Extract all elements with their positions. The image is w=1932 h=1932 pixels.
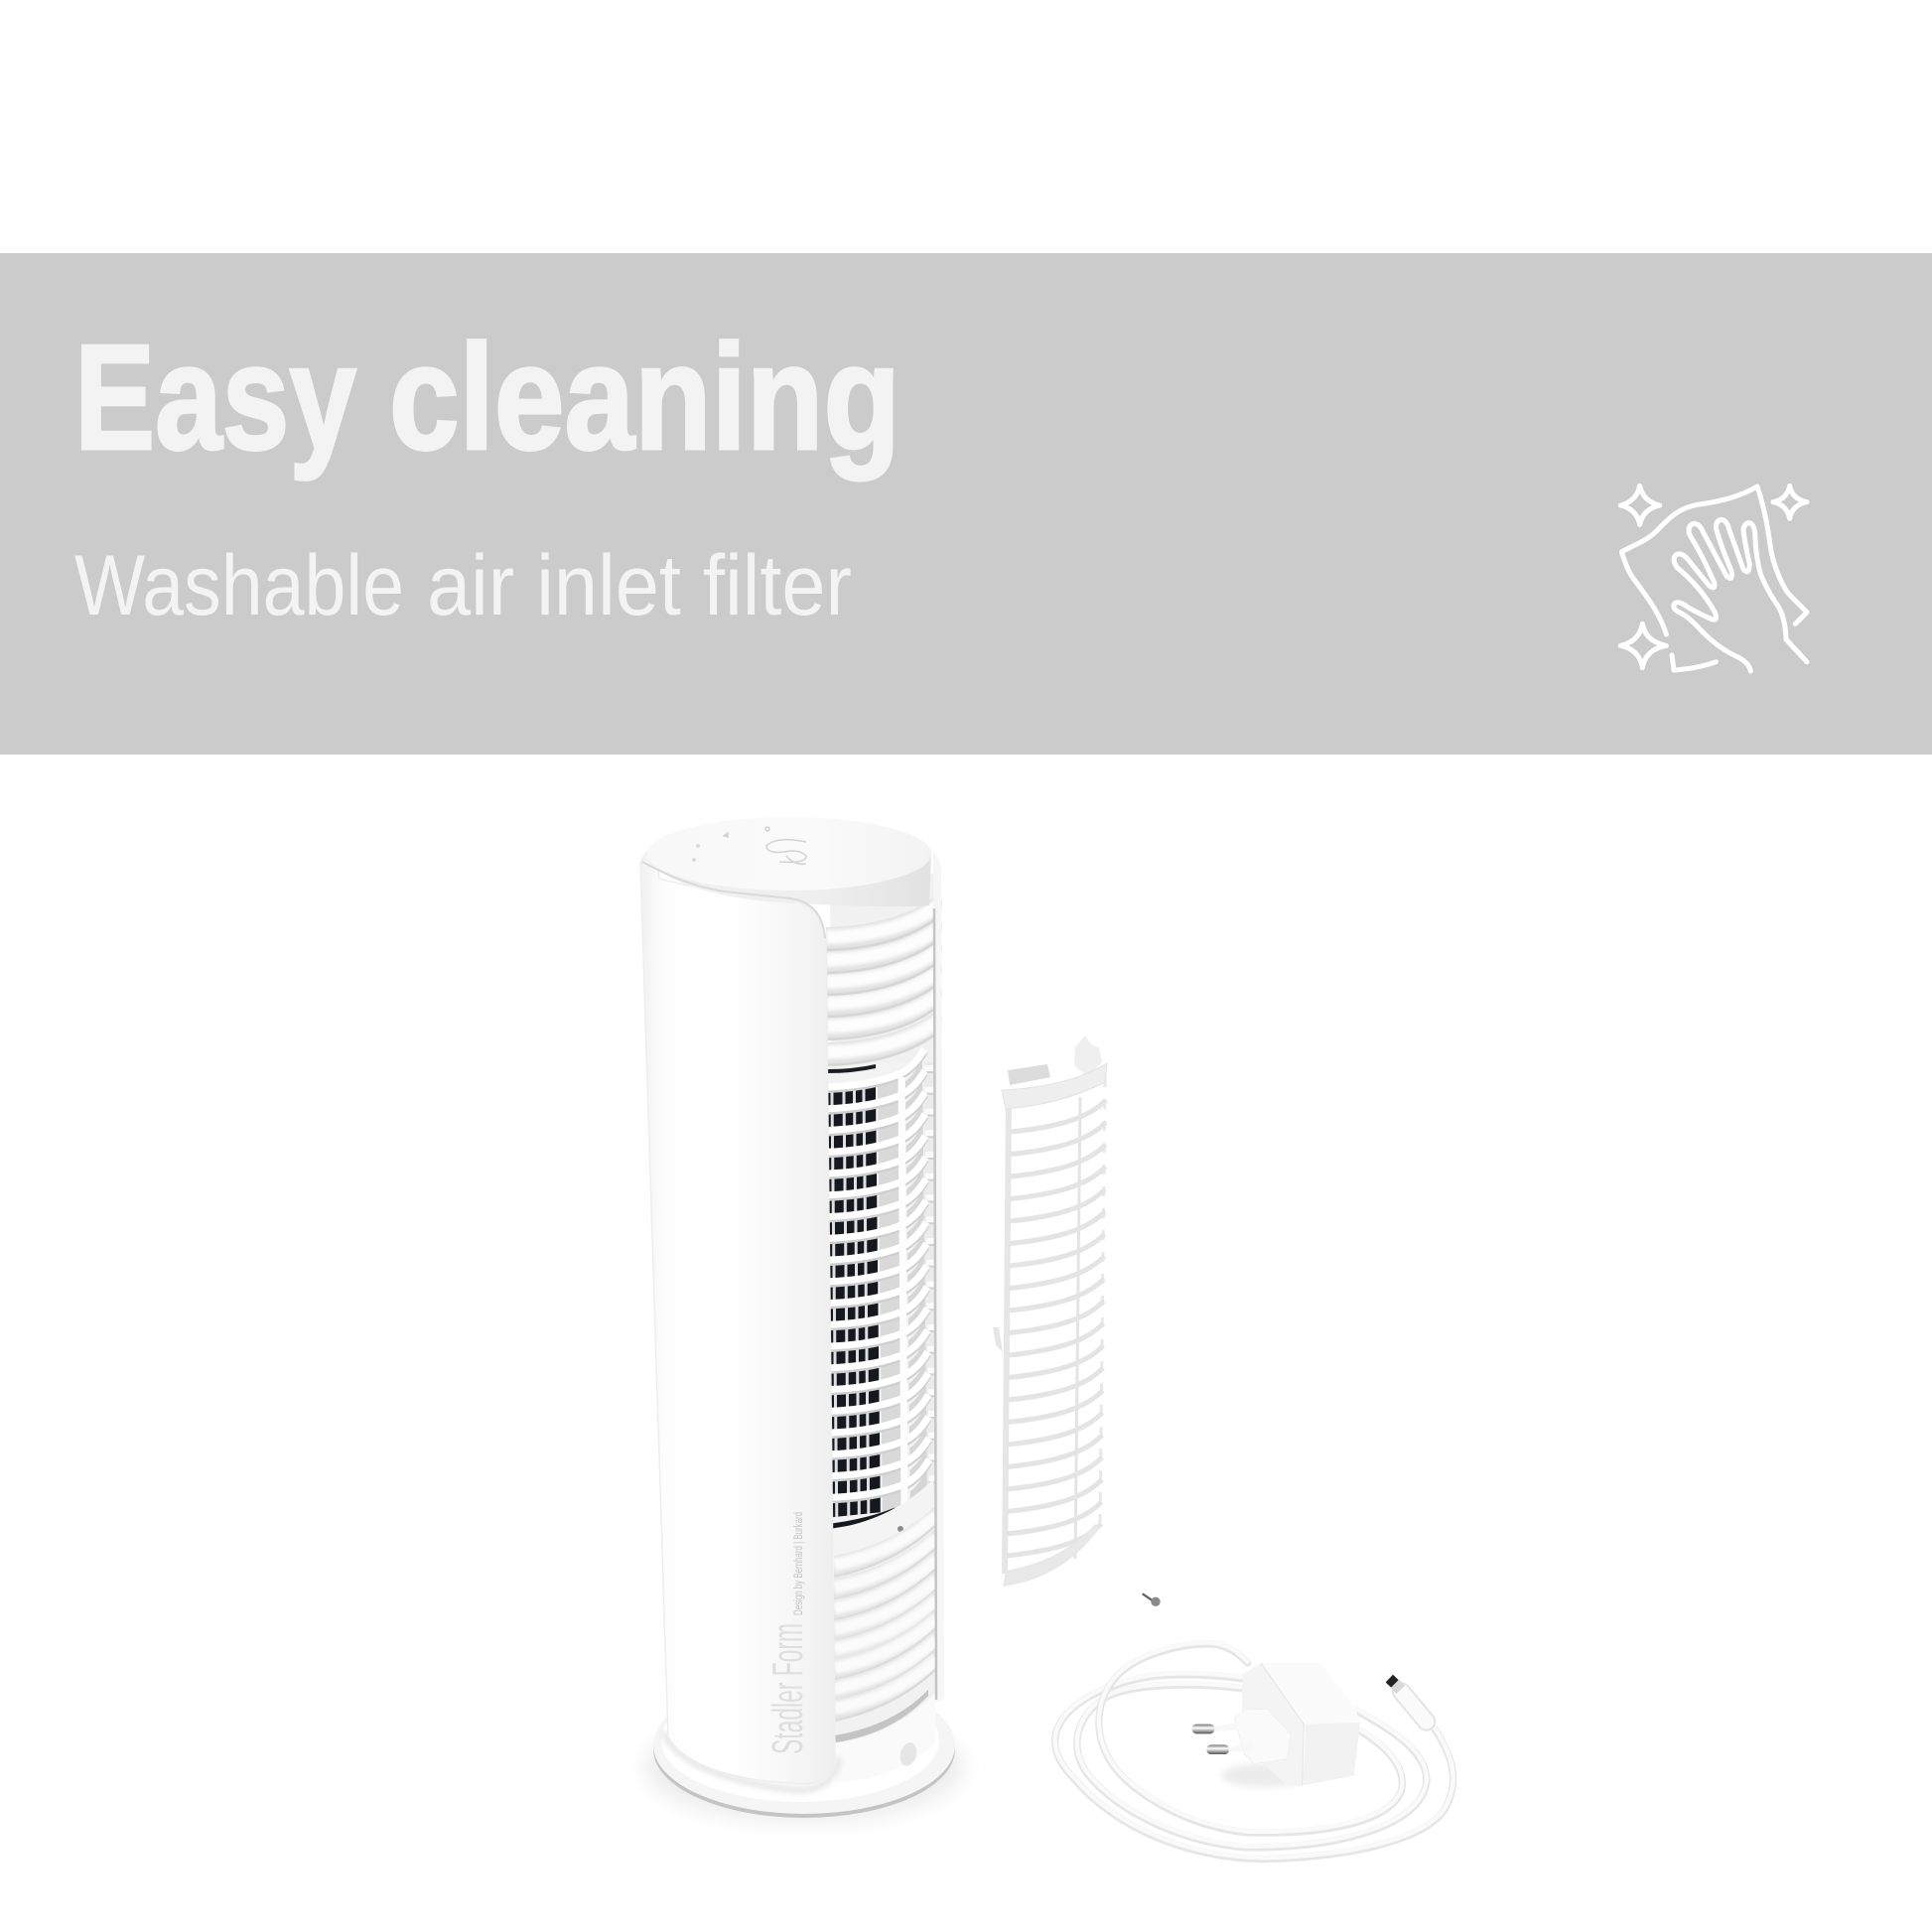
lower grille edge <box>832 1510 896 1526</box>
title: Easy <box>74 313 356 481</box>
outer shell <box>640 846 835 1784</box>
bottom band <box>1003 1524 1099 1587</box>
subtitle: Washable <box>74 538 404 633</box>
right rail <box>1100 1077 1105 1524</box>
filter clip <box>1074 1035 1102 1077</box>
DC connector <box>1389 1679 1427 1722</box>
grille rows <box>827 1049 938 1517</box>
icon: hand wiping with cloth and sparkles <box>1620 485 1807 671</box>
embossed brand text: Design by Bernhard | Burkard <box>793 1512 805 1615</box>
top band <box>1002 1063 1107 1109</box>
body lower white section <box>836 1693 935 1782</box>
grille gutter <box>924 1062 934 1529</box>
title <box>74 313 900 481</box>
plug pins <box>1192 1723 1253 1754</box>
power adapter and cable <box>1055 1643 1453 1860</box>
disc side <box>647 854 931 906</box>
cable coils <box>1055 1643 1453 1860</box>
small screw <box>1143 1593 1161 1606</box>
product: removable inlet filter <box>993 1035 1107 1587</box>
plug head <box>1234 1710 1291 1764</box>
filter rear tab <box>1008 1064 1050 1085</box>
slats <box>1006 1100 1106 1556</box>
subtitle: air inlet filter <box>427 538 852 633</box>
side latch <box>993 1327 1003 1352</box>
top disc <box>647 817 931 891</box>
base socket hole <box>897 1740 919 1768</box>
shell contact shadow <box>663 1732 839 1790</box>
title: cleaning <box>389 313 900 481</box>
grille background <box>827 1062 924 1529</box>
inner body <box>830 874 935 1782</box>
center post <box>1075 1097 1080 1559</box>
left rail <box>1005 1102 1009 1574</box>
subtitle <box>74 538 852 633</box>
logo and touch buttons <box>693 827 806 864</box>
adapter body <box>1241 1663 1360 1785</box>
base shadow <box>645 1713 963 1822</box>
grey header band <box>0 253 1932 755</box>
embossed brand text: Stadler Form <box>763 1623 812 1754</box>
right side strip <box>933 852 944 1702</box>
grille vertical post <box>901 1077 904 1509</box>
lower ribs <box>833 1479 939 1742</box>
upper ribs <box>826 894 942 1073</box>
shell lip shadow <box>642 862 825 938</box>
adapter shadow <box>1221 1764 1308 1787</box>
product: tower fan <box>640 817 963 1822</box>
base plate <box>653 1677 955 1818</box>
